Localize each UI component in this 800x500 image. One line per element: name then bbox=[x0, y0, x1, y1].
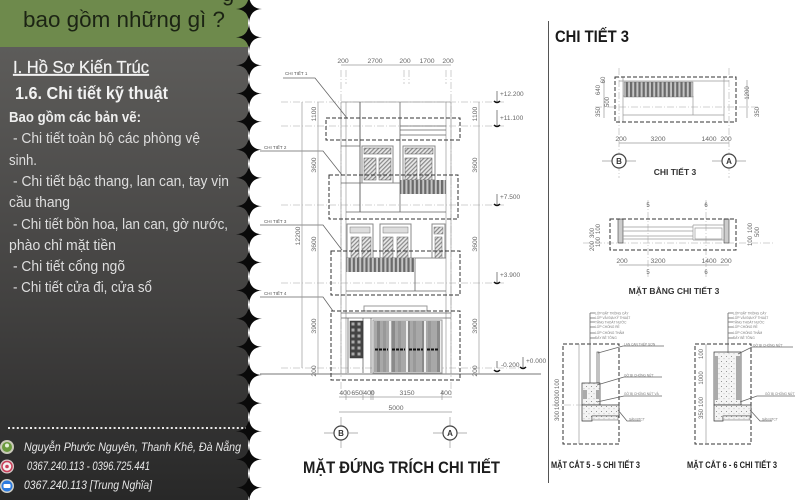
bottom dimensions: 5000 bbox=[388, 405, 404, 412]
level markers bbox=[494, 91, 546, 372]
drawing: section 6-6: LỚP CHỐNG THẤM bbox=[733, 330, 763, 335]
drawing: detail 3 plan: 100 bbox=[596, 236, 602, 247]
text block: drawing list: cầu thang bbox=[9, 195, 70, 211]
top dimensions: 1700 bbox=[419, 58, 435, 65]
panel: green title band: bao gồm những gì ? bbox=[23, 7, 225, 32]
vertical dimensions: 3900 bbox=[311, 318, 318, 334]
icon: phone bbox=[0, 460, 14, 474]
drawing: section 6-6: 1000 bbox=[699, 371, 705, 385]
drawing: section 6-6: SÀN BTCT bbox=[762, 418, 778, 422]
caption: MẶT BẰNG CHI TIẾT 3 bbox=[629, 286, 720, 296]
balcony rail: third floor bbox=[346, 258, 415, 272]
bottom dimensions: 400 bbox=[440, 390, 452, 397]
drawing: detail 3 elevation: 1400 bbox=[701, 136, 717, 143]
text block: drawing list: sinh. bbox=[9, 153, 37, 169]
top dimensions: 2700 bbox=[367, 58, 383, 65]
doors bbox=[373, 320, 442, 373]
drawing: detail 3 plan: 5 bbox=[646, 270, 650, 276]
panel: detail 3 bbox=[551, 27, 795, 471]
vertical dimensions: 3900 bbox=[472, 318, 479, 334]
drawing: section 5-5: TẦNG THOÁT NƯỚC bbox=[595, 320, 627, 324]
window grille bbox=[350, 321, 363, 358]
drawing: section 6-6: LỚP VẢI ĐỊA KỸ THUẬT bbox=[733, 315, 768, 320]
grid bubble A bbox=[712, 154, 746, 168]
level markers: +3.900 bbox=[500, 272, 520, 279]
drawing: section 5-5: ĐÁY BÊ TÔNG bbox=[595, 335, 617, 340]
drawing: section 6-6: TẦNG THOÁT NƯỚC bbox=[733, 320, 765, 324]
drawing title: MẶT ĐỨNG TRÍCH CHI TIẾT bbox=[303, 458, 501, 477]
contact: phone: 0367.240.113 - 0396.725.441 bbox=[27, 461, 150, 473]
drawing: detail 3 plan: 200 bbox=[616, 258, 628, 265]
detail callouts bbox=[260, 70, 347, 311]
grid bubble A: A bbox=[447, 429, 453, 438]
dashed detail boxes bbox=[326, 118, 460, 380]
drawing: section 5-5: 100 bbox=[555, 399, 561, 410]
vertical dimensions: 3600 bbox=[311, 157, 318, 173]
grid bubble B: B bbox=[338, 429, 344, 438]
drawing: detail 3 elevation: 1200 bbox=[745, 86, 751, 100]
vertical dimensions: 200 bbox=[311, 365, 318, 377]
drawing: detail 3 plan: 100 bbox=[748, 222, 754, 233]
bottom dimensions bbox=[339, 390, 452, 412]
caption: MẶT CẮT 5 - 5 CHI TIẾT 3 bbox=[551, 460, 640, 471]
level markers: +0.000 bbox=[526, 358, 546, 365]
level markers: -0.200 bbox=[501, 362, 520, 369]
text block: drawing list: Bao gồm các bản vẽ: bbox=[9, 110, 141, 126]
drawing: section 5-5: LỚP VẢI ĐỊA KỸ THUẬT bbox=[595, 315, 630, 320]
level markers: +7.500 bbox=[500, 194, 520, 201]
vertical dimensions: 3600 bbox=[472, 157, 479, 173]
panel: green title band bbox=[0, 0, 248, 47]
grid bubble A: A bbox=[726, 157, 732, 166]
balcony rail: second floor bbox=[400, 180, 446, 194]
text block: drawing list: phào chỉ mặt tiền bbox=[9, 238, 116, 254]
drawing: detail 3 plan: 1400 bbox=[701, 258, 717, 265]
text block: drawing list bbox=[9, 110, 229, 296]
drawing: section 5-5: SÀN BTCT bbox=[629, 418, 645, 422]
drawing: detail 3 plan: 6 bbox=[704, 270, 708, 276]
drawing: section 5-5: 100 bbox=[555, 378, 561, 389]
drawing: section 6-6: 100 bbox=[699, 348, 705, 359]
drawing: detail 3 plan: 100 bbox=[596, 223, 602, 234]
ground floor facade bbox=[341, 306, 451, 373]
vertical dimensions: 3600 bbox=[311, 236, 318, 252]
heading: section: I. Hồ Sơ Kiến Trúc bbox=[13, 57, 149, 77]
drawing: detail 3 plan: 6 bbox=[704, 203, 708, 209]
bottom dimensions: 400 bbox=[339, 390, 351, 397]
drawing: detail 3 plan bbox=[583, 200, 773, 296]
drawing: detail 3 elevation: 350 bbox=[755, 106, 761, 117]
caption: CHI TIẾT 3 bbox=[654, 167, 697, 177]
drawing: section 6-6: 350 bbox=[699, 408, 705, 419]
detail callouts: CHI TIẾT 1 bbox=[285, 70, 308, 76]
drawing: detail 3 elevation bbox=[595, 68, 761, 178]
drawing: detail 3 elevation: 640 bbox=[596, 84, 602, 95]
drawing: section 5-5: 300 bbox=[555, 389, 561, 400]
drawing: section 5-5: LỚP CHỐNG THẤM bbox=[595, 330, 625, 335]
contact: zalo: 0367.240.113 [Trung Nghĩa] bbox=[24, 480, 153, 492]
top dimensions: 200 bbox=[337, 58, 349, 65]
drawing: section 5-5: LAN CAN THÉP SƠN bbox=[624, 342, 656, 346]
contact: address: Nguyễn Phước Nguyên, Thanh Khê, Đà Nẵng bbox=[24, 441, 242, 454]
vertical dimensions: 200 bbox=[472, 365, 479, 377]
caption: MẶT CẮT 6 - 6 CHI TIẾT 3 bbox=[687, 460, 777, 471]
drawing: detail 3 elevation: 60 bbox=[601, 76, 607, 83]
drawing: section 6-6: ĐÁY BÊ TÔNG bbox=[733, 335, 755, 340]
vertical dimensions: 1100 bbox=[311, 106, 318, 121]
contact: phone bbox=[0, 460, 150, 474]
scalloped star edge bbox=[236, 0, 262, 500]
drawing: detail 3 plan: 3200 bbox=[650, 258, 666, 265]
drawing: detail 3 plan: 300 bbox=[590, 227, 596, 238]
drawing: section 6-6: GỜ BỊ CHỐNG NỨT bbox=[765, 391, 795, 396]
contact: zalo bbox=[0, 479, 153, 493]
top dimensions: 200 bbox=[399, 58, 411, 65]
drawing: detail 3 elevation: 200 bbox=[720, 136, 732, 143]
detail callouts: CHI TIẾT 4 bbox=[264, 290, 287, 296]
drawing: detail 3 plan: 100 bbox=[748, 235, 754, 246]
grid bubble A bbox=[433, 417, 467, 448]
text block: drawing list: - Chi tiết toàn bộ các phòng vệ bbox=[13, 131, 200, 147]
drawing: section 6-6: GỜ BỊ CHỐNG NỨT bbox=[753, 342, 783, 348]
drawing: section 5-5: 300 bbox=[555, 410, 561, 421]
drawing: section 6-6 bbox=[687, 310, 795, 471]
text block: drawing list: - Chi tiết bậc thang, lan can, tay vịn bbox=[13, 174, 229, 190]
drawing: front elevation bbox=[260, 58, 546, 477]
vertical dimensions: 12200 bbox=[295, 226, 302, 245]
top dimensions: 200 bbox=[442, 58, 454, 65]
drawing: detail 3 elevation: 200 bbox=[615, 136, 627, 143]
drawing: detail 3 elevation: 3200 bbox=[650, 136, 666, 143]
vertical dimensions: 1100 bbox=[472, 106, 479, 121]
drawing: detail 3 elevation: 350 bbox=[596, 106, 602, 117]
text block: drawing list: - Chi tiết bồn hoa, lan can, gờ nước, bbox=[13, 217, 228, 233]
building outline bbox=[341, 102, 451, 374]
text block: drawing list: - Chi tiết cửa đi, cửa sổ bbox=[13, 280, 152, 296]
level markers: +11.100 bbox=[500, 115, 524, 122]
text block: drawing list: - Chi tiết cổng ngõ bbox=[13, 259, 125, 275]
drawing: detail 3 plan: 5 bbox=[646, 203, 650, 209]
reference levels bbox=[260, 70, 541, 395]
bottom dimensions: 650 bbox=[351, 390, 363, 397]
windows: second floor bbox=[362, 146, 435, 183]
bottom dimensions: 400 bbox=[363, 390, 375, 397]
heading: detail 3: CHI TIẾT 3 bbox=[555, 27, 629, 46]
heading: sub section: 1.6. Chi tiết kỹ thuật bbox=[15, 83, 168, 103]
windows: third floor bbox=[347, 224, 445, 258]
top dimensions bbox=[337, 58, 454, 65]
detail callouts: CHI TIẾT 2 bbox=[264, 144, 287, 150]
drawing: detail 3 elevation: 500 bbox=[605, 96, 611, 107]
drawing: section 5-5 bbox=[551, 310, 664, 471]
drawing: detail 3 plan: 200 bbox=[590, 240, 596, 251]
detail callouts: CHI TIẾT 3 bbox=[264, 218, 287, 224]
drawing: section 6-6: 100 bbox=[699, 396, 705, 407]
drawing: section 5-5: GỜ BỊ CHỐNG NỨT VÀ bbox=[624, 391, 660, 396]
vertical dimensions: 3600 bbox=[472, 236, 479, 252]
icon: zalo bbox=[0, 479, 14, 493]
grid bubble B bbox=[324, 417, 358, 448]
drawing: section 5-5: LỚP ĐẤT TRỒNG CÂY bbox=[595, 310, 629, 316]
drawing: section 6-6: LỚP CHỐNG RỄ bbox=[733, 324, 758, 329]
drawing: section 5-5: GỜ BỊ CHỐNG NỨT bbox=[624, 372, 654, 378]
drawing: detail 3 plan: 500 bbox=[755, 226, 761, 237]
icon: location bbox=[0, 440, 14, 454]
vertical dimensions bbox=[295, 102, 479, 377]
grid bubble B: B bbox=[616, 157, 622, 166]
level markers: +12.200 bbox=[500, 91, 524, 98]
drawing: detail 3 plan: 200 bbox=[720, 258, 732, 265]
drawing: section 6-6: LỚP ĐẤT TRỒNG CÂY bbox=[733, 310, 767, 316]
bottom dimensions: 3150 bbox=[399, 390, 415, 397]
drawing: section 5-5: LỚP CHỐNG RỄ bbox=[595, 324, 620, 329]
panel: left sidebar bbox=[0, 0, 262, 500]
grid bubble B bbox=[602, 154, 636, 168]
